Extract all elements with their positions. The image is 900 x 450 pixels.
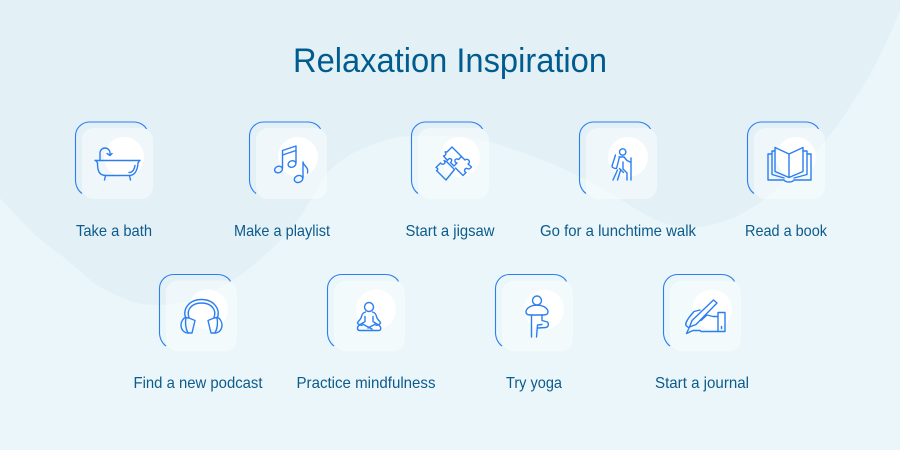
label: Go for a lunchtime walk xyxy=(540,223,697,240)
label: Make a playlist xyxy=(234,223,330,240)
label: Take a bath xyxy=(76,223,152,240)
label: Try yoga xyxy=(506,375,562,392)
card: make a playlist xyxy=(234,122,330,240)
label: Practice mindfulness xyxy=(296,375,436,392)
icon: hiker xyxy=(612,149,631,180)
card: practice mindfulness xyxy=(296,274,436,392)
icon: music notes xyxy=(274,146,308,184)
title: Relaxation Inspiration xyxy=(293,42,607,80)
icon: hand writing with pen xyxy=(686,300,725,334)
icon: open book xyxy=(768,148,811,182)
icon: bathtub xyxy=(95,148,140,180)
icon: puzzle pieces xyxy=(436,147,472,180)
label: Find a new podcast xyxy=(134,375,263,392)
label: Start a jigsaw xyxy=(406,223,495,240)
icon: meditation figure xyxy=(357,302,381,330)
icon: headphones xyxy=(181,300,222,333)
icon: tree pose figure xyxy=(526,296,548,337)
card: start a jigsaw xyxy=(406,122,495,240)
card: read a book xyxy=(745,122,828,240)
card: take a bath xyxy=(76,122,153,240)
card: start a journal xyxy=(655,274,749,392)
card: try yoga xyxy=(496,274,573,392)
label: Read a book xyxy=(745,223,828,240)
card: find a new podcast xyxy=(134,274,263,392)
label: Start a journal xyxy=(655,375,749,392)
card: go for a lunchtime walk xyxy=(540,122,697,240)
